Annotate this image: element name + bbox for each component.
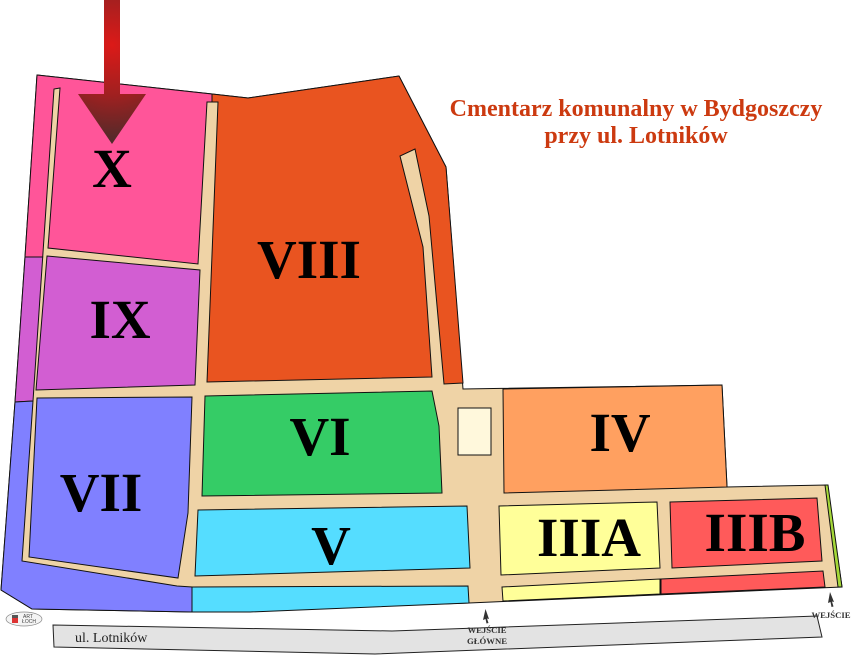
street: ul. Lotników [53, 616, 822, 654]
label: main entrance [467, 625, 507, 646]
logo: ŁOCH [22, 619, 36, 625]
plot: section VIII [207, 76, 463, 384]
section label IV: IV [589, 402, 651, 463]
building: cream rectangle [458, 408, 491, 455]
section label IX: IX [89, 289, 151, 350]
label: main entrance: WEJŚCIE [467, 625, 507, 635]
logo [6, 612, 42, 626]
green strip [825, 485, 842, 587]
lower strip: section IIIA [502, 579, 660, 601]
label: main entrance: GŁÓWNE [467, 636, 507, 646]
plot: section V [195, 506, 470, 576]
section label IIIA: IIIA [537, 507, 641, 568]
plot: section IX [36, 256, 200, 390]
logo: ART [23, 614, 33, 620]
icon: main entrance arrow [483, 609, 489, 624]
plot: section IV [503, 385, 727, 493]
street: ul. Lotników: ul. Lotników [75, 631, 148, 646]
lower strip: section V [192, 586, 469, 612]
lower strip: section IIIB [661, 571, 825, 594]
outer strip: section IX [15, 257, 43, 402]
title: przy ul. Lotników [544, 123, 728, 149]
section label VIII: VIII [257, 229, 361, 290]
plot: section VI [202, 391, 442, 496]
plot: section X [25, 75, 212, 264]
icon: side entrance arrow [828, 592, 834, 607]
plot: section IIIA [499, 502, 660, 575]
section label VI: VI [289, 406, 351, 467]
section label VII: VII [60, 462, 142, 523]
outer strip: section VII [1, 401, 192, 612]
title [450, 96, 822, 149]
plot: section IIIB [670, 498, 822, 568]
plot: section VII [29, 397, 192, 578]
section label X: X [92, 138, 132, 199]
arrow: location marker [78, 0, 146, 144]
title: Cmentarz komunalny w Bydgoszczy [450, 96, 822, 122]
section label IIIB: IIIB [705, 502, 805, 563]
label: side entrance: WEJŚCIE [811, 610, 851, 620]
section label V: V [311, 515, 351, 576]
